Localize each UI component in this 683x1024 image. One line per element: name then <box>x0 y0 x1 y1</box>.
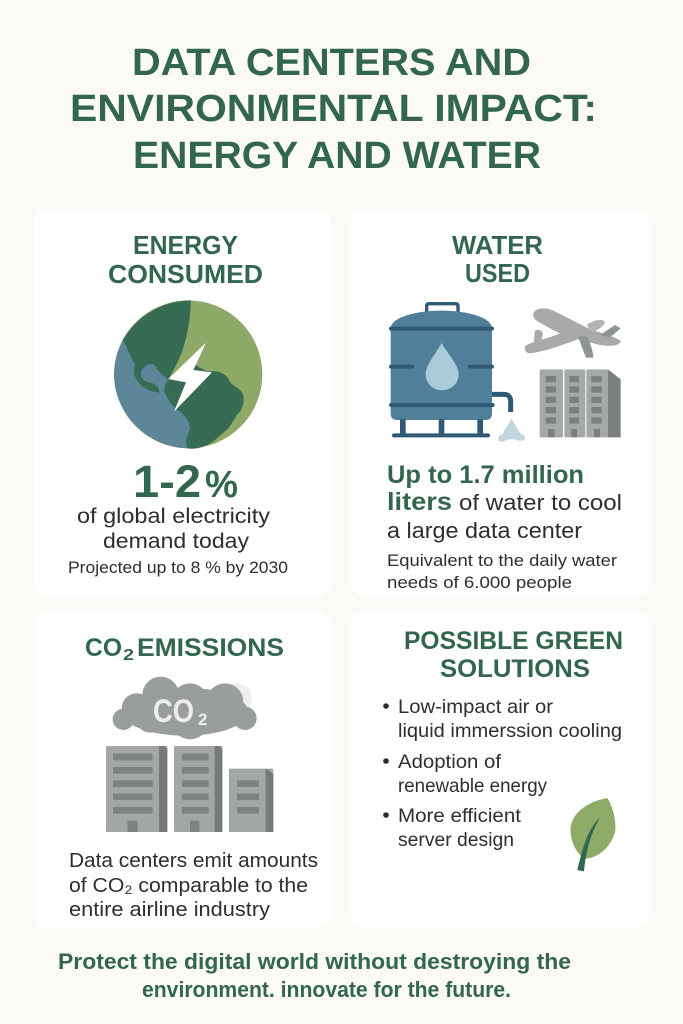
heading: water used <box>452 230 543 288</box>
text: CO2 comparison: entire airline industry <box>69 898 271 921</box>
title <box>70 42 597 177</box>
list item: cooling <box>383 696 622 742</box>
title: DATA CENTERS AND <box>132 42 531 84</box>
panel: water used <box>351 209 649 596</box>
footer message <box>58 949 571 1002</box>
stat: water volume: Up to 1.7 million <box>387 461 584 489</box>
stat: 1-2 % <box>133 456 238 507</box>
list item: renewable energy: renewable energy <box>398 775 547 797</box>
stat: 1-2 %: 1-2 <box>133 456 201 507</box>
list item: server design: More efficient <box>398 805 522 827</box>
text: electricity demand: demand today <box>103 530 250 553</box>
text: water equivalent: Equivalent to the daily water <box>387 551 617 570</box>
panel: possible green solutions <box>351 611 649 928</box>
stat: water volume: of water to cool <box>459 490 622 515</box>
heading: CO2 emissions: 2 <box>123 647 134 664</box>
text: CO2 comparison <box>69 849 318 921</box>
icon: CO2 cloud: CO <box>153 693 194 729</box>
stat: water volume: liters <box>387 488 452 516</box>
icon: water tank <box>391 304 525 442</box>
footer message: Protect the digital world without destroying the <box>58 949 571 974</box>
list item: server design <box>383 805 522 851</box>
list item: renewable energy: Adoption of <box>398 751 502 773</box>
title: ENVIRONMENTAL IMPACT: <box>70 88 597 130</box>
stat: water volume: a large data center <box>387 518 582 543</box>
heading: possible green solutions <box>404 627 623 683</box>
list item: renewable energy <box>383 751 547 797</box>
heading: CO2 emissions <box>85 634 284 664</box>
footer message: environment. innovate for the future. <box>142 977 511 1002</box>
icon: office buildings <box>106 746 273 832</box>
list item: cooling: Low-impact air or <box>398 696 554 718</box>
text: electricity demand: of global electricity <box>77 505 271 528</box>
text: electricity demand <box>77 505 271 553</box>
icon: leaf <box>571 798 615 871</box>
panel: energy consumed <box>34 209 331 596</box>
text: CO2 comparison: of CO₂ comparable to the <box>69 874 308 897</box>
title: ENERGY AND WATER <box>133 135 541 177</box>
heading: energy consumed <box>108 230 263 289</box>
stat: 1-2 %: % <box>205 464 238 506</box>
icon: CO2 cloud: 2 <box>198 710 207 729</box>
heading: water used: WATER <box>452 230 543 260</box>
heading: CO2 emissions: CO <box>85 634 122 662</box>
icon: CO2 cloud <box>113 677 257 739</box>
panel: CO2 emissions <box>35 611 331 928</box>
icon: apartment buildings <box>540 369 621 437</box>
icon: globe with lightning bolt <box>114 300 262 449</box>
heading: possible green solutions: POSSIBLE GREEN <box>404 627 623 655</box>
heading: possible green solutions: SOLUTIONS <box>440 655 590 683</box>
list item: server design: server design <box>398 829 514 851</box>
text: water equivalent <box>387 551 617 592</box>
heading: energy consumed: CONSUMED <box>108 259 263 289</box>
text: projection: Projected up to 8 % by 2030 <box>68 559 288 577</box>
heading: energy consumed: ENERGY <box>133 230 238 260</box>
text: water equivalent: needs of 6.000 people <box>387 573 572 592</box>
stat: water volume <box>387 461 622 543</box>
heading: CO2 emissions: EMISSIONS <box>137 634 284 662</box>
text: CO2 comparison: Data centers emit amounts <box>69 849 318 872</box>
icon: airplane <box>525 308 621 358</box>
heading: water used: USED <box>465 258 530 288</box>
list item: cooling: liquid immerssion cooling <box>398 720 622 742</box>
